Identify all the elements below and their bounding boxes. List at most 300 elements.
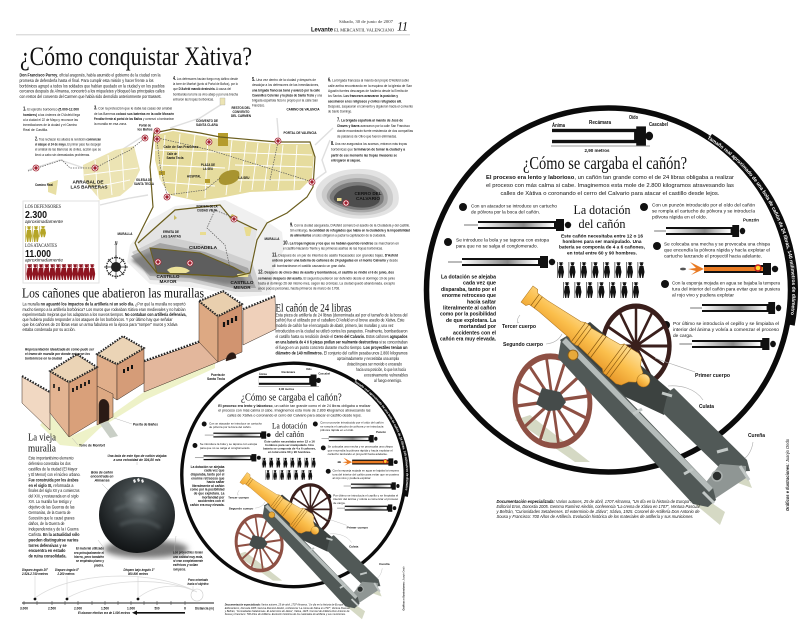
panel: defenders and attackers: 2.300	[25, 210, 47, 221]
heading: the old wall: muralla	[28, 442, 56, 454]
cannonball callouts: Almansa	[94, 478, 110, 482]
panel: how the cannon was loaded (small circle): Tercer cuerpo	[228, 495, 249, 499]
back wall right	[243, 297, 276, 345]
cannonball callouts: Bola de cañón	[91, 470, 114, 474]
map place labels: SANTA CLARA	[196, 123, 218, 127]
text: crew danger: La dotación se alejaba	[441, 274, 497, 280]
cannonball callouts: romperse.	[173, 567, 186, 571]
chart: firing range: 1.000	[127, 606, 135, 610]
map place labels: LA SEU	[238, 176, 250, 180]
loading steps: se rompía el cartucho de pólvora y se introducía	[652, 208, 755, 214]
text: crew danger: enorme retroceso que	[442, 293, 496, 299]
numbered siege steps 4-8: que D'Asfeld mandó destruirla. A causa del	[173, 86, 231, 91]
wall callouts: borbónicos en la ciudad	[25, 356, 63, 360]
loading steps: Con la esponja mojada en agua se bajaba la tempera	[672, 280, 780, 286]
text: the old wall: defensivo conectaba los dos	[28, 461, 71, 466]
text: crew size: Este cañón necesitaba entre 12 o 16	[561, 234, 643, 240]
panel: how the cannon was loaded (small circle)	[180, 362, 410, 620]
panel: how the cannon was loaded (small circle): de que explotara. La	[194, 492, 224, 496]
panel: how the cannon was loaded (small circle): Por último se introducía el cepillo y se limpiaba el	[333, 493, 399, 497]
panel: defenders and attackers: LOS DEFENSORES	[25, 205, 61, 210]
numbered siege steps 4-8: de Santo Domingo.	[328, 108, 352, 114]
graphics credit: Gráficos e Ilustraciones: Juanjo Ondo	[785, 439, 790, 511]
loading steps: cartucho lanzando el proyectil hacia adelante.	[664, 254, 762, 260]
numbered siege steps 4-8: bombardeo la torre se vino abajo y por una brecha	[173, 92, 239, 96]
loading steps: Por último se introducía el cepillo y se limpiaba el	[673, 321, 779, 327]
text: crew danger: hacía saltar	[467, 299, 497, 305]
text: the walls paragraph: que hubiera podido responder a los ataques de los borbónicos. Y por último hay que señalar	[22, 317, 173, 322]
panel: how the cannon was loaded (small circle): calles de Xàtiva o coronando el cerro del Calvario para atacar el castillo desde lejos.	[227, 414, 362, 418]
cannonball callouts: Una bola de este tipo de cañón viajaba	[108, 454, 166, 458]
numbered siege steps 9-12: 10. La tropa inglesa y los que no habían querido rendirse se marcharon en	[283, 240, 399, 246]
chart: firing range: El alcance efectivo era de 1.000 metros	[78, 610, 131, 615]
map place labels: Calle de San Francisco	[164, 145, 199, 149]
loading steps: Con un punzón introducido por el oído del cañón	[652, 202, 755, 208]
cannonball callouts: ni eran completamente	[173, 559, 203, 563]
gate block	[97, 386, 113, 425]
numbered siege steps 4-8: Después, saquearon el convento y siguieron hacia el convento	[328, 104, 414, 108]
map place labels: HOSPITAL	[187, 174, 202, 178]
text: the old wall: Sucesión que le causó graves	[28, 516, 75, 520]
panel: how the cannon was loaded (small circle): Con un atacador se introduce un cartucho	[209, 421, 262, 425]
chart: firing range: 2.200 metros	[57, 572, 75, 576]
numbered siege steps 1-3: el arrabal de las Barreras de civiles, acción que se	[35, 146, 102, 152]
middle tower	[97, 355, 117, 400]
numbered siege steps 1-3: 2. Tras rechazar los aliados la rendición comienzan	[35, 136, 101, 142]
header: newspaper strip: Levante	[311, 26, 334, 34]
map place labels: MURALLA	[264, 237, 280, 241]
illustration: cannonball	[99, 477, 188, 558]
text: the old wall: de ruina consolidada.	[28, 554, 66, 559]
text: crew danger: como por la posibilidad	[440, 312, 496, 318]
panel: how the cannon was loaded (small circle): Primer cuerpo	[347, 525, 368, 529]
panel: how the cannon was loaded (small circle): cartucho lanzando el proyectil hacia adelante.	[328, 452, 388, 456]
map place labels: ARRABAL DE	[72, 180, 104, 184]
loading steps: al rojo vivo y pudiera explotar	[672, 292, 734, 298]
panel: how the cannon was loaded (small circle): Gráficos e Ilustraciones: Juanjo Ondo	[401, 566, 405, 611]
numbered siege steps 1-3: Fenollar frente al portal de los Baños y comenzó a bombardear	[94, 116, 174, 121]
loading steps: de pólvora por la boca del cañón.	[471, 210, 540, 216]
panel: how the cannon was loaded (small circle): Documentación especializada: Varios autores, 25 de abril, 1707 Almansa, “Un día en la historia de Europa”.	[225, 603, 345, 607]
text: crew danger: disparaba, tanto por el	[441, 287, 496, 293]
numbered siege steps 4-8: los Santos. Los franceses avanzaron la posición y	[328, 93, 399, 98]
text: the old wall: torres defensivas y se	[28, 543, 67, 548]
numbered siege steps 4-8: desalojar a los defensores de las inmediaciones,	[252, 82, 319, 87]
text: 24-pound cannon: el castillo hasta su rendición desde el Cerro del Calvario. Estos cañones agrupados	[276, 334, 408, 339]
numbered siege steps 4-8: donde encontrarán fuerte resistencia de dos compañías	[337, 128, 413, 133]
text: the old wall: finales del siglo XII y a comienzos	[28, 488, 80, 493]
panel: how the cannon was loaded (small circle): El proceso era lento y laborioso , un cañón tan grande como el de 24 libras obligaba a realizar	[218, 404, 371, 408]
numbered siege steps 1-3: llevó a cabo sin demasiados problemas.	[35, 152, 90, 157]
intro text: calles de Xàtiva o coronando el cerro del Calvario para atacar el castillo desde lejos.	[500, 191, 720, 197]
cannonball callouts: encontrada en	[90, 474, 114, 478]
left tower	[50, 372, 69, 437]
panel: how the cannon was loaded (small circle): se rompía el cartucho de pólvora y se introducía	[320, 424, 384, 428]
text: the walls paragraph: La muralla no aguantó los impactos de la artillería ni un solo día. ¿Por qué la muralla no soportó	[22, 302, 186, 306]
loading steps: Se introduce la bola y se tapona con estopa	[456, 238, 549, 244]
panel: how the cannon was loaded (small circle): 2,90 metros	[279, 387, 294, 391]
loading steps	[444, 202, 781, 350]
chart: firing range: 500	[154, 606, 160, 610]
text: the old wall: Germanías, de la Guerra de	[28, 510, 71, 515]
map place labels: LAS BARRERAS	[70, 184, 108, 190]
heading: the old wall: La vieja	[28, 432, 56, 444]
chart: firing range: Poco orientado	[188, 578, 209, 582]
text: the old wall: castillos de la ciudad (El Mayor	[28, 466, 78, 471]
intro text: el proceso con más calma si cabe. Imaginemos esta mole de 2.800 kilogramos atravesando las	[486, 183, 734, 189]
numbered siege steps 1-3: de las Barreras colocó sus baterías en la calle Mossèn	[94, 111, 174, 116]
panel: how the cannon was loaded (small circle): al rojo vivo y pudiera explotar	[333, 476, 371, 480]
text: 24-pound cannon: cañón) fue el utilizado por el caballero D'Asfeld en el breve asedio de Xàtiva. Este	[276, 318, 405, 322]
text: the walls paragraph: que los cañones de 24 libras eran un arma fabulosa en la época para “romper” muros y Xàtiva	[22, 322, 178, 327]
panel: how the cannon was loaded (small circle): de carga.	[333, 501, 346, 505]
map place labels: Calle de	[167, 152, 177, 156]
panel: defenders and attackers: aproximadamente	[25, 219, 63, 224]
panel: how the cannon was loaded (small circle): mortandad por	[202, 495, 225, 499]
numbered siege steps 4-8: 5. Una vez dentro de la ciudad y después de	[252, 77, 317, 83]
panel: how the cannon was loaded (small circle): Recámara	[282, 370, 295, 374]
cannonball callouts: una calidad muy mala,	[173, 555, 203, 559]
right tower	[199, 302, 218, 362]
cannonball callouts: a una velocidad de 304,80 m/s	[114, 458, 160, 462]
diagram: cannon bore: Cascabel	[649, 122, 669, 128]
text: the old wall: pueden distinguirse varios	[28, 537, 79, 542]
panel: how the cannon was loaded (small circle): Sousa y Francisco: 700 Años de Artillería. Evolución histórica de los materiales de artillería y sus municiones.	[225, 612, 346, 616]
numbered siege steps 4-8: Chaves y Ibarra avanzaron por la calle San Francisco	[337, 123, 411, 128]
cannon part labels	[502, 315, 765, 458]
text: 24-pound cannon: excesivamente vulnerables	[364, 372, 408, 378]
text: the old wall: Carlista. En la actualidad sólo	[28, 532, 80, 537]
diagram: cannon bore: Recámara	[589, 120, 611, 126]
numbered siege steps 4-8: la torre de Manfort (junto al Portal de Baños), por lo	[173, 81, 239, 86]
numbered siege steps 1-3	[23, 106, 174, 157]
castle band	[150, 248, 249, 277]
loading steps: interior del ánima y volvía a comenzar el proceso	[673, 327, 779, 333]
intro text block	[20, 72, 164, 99]
wall callouts	[25, 348, 226, 448]
panel: how the cannon was loaded (small circle): y Beltrán, “Curiosidades Setabenses. El exterminio de Játiva”, Xàtiva, 1925. Coronel de Artillería Don Antonio de	[224, 609, 350, 613]
text: 24-pound cannon: modelo de cañón fue el encargado de abatir, primero, las murallas y, una vez	[276, 323, 394, 328]
loading steps: Punzón	[743, 218, 759, 224]
text: the old wall: del XIII, y restaurada en el siglo	[28, 494, 79, 499]
cannon part labels: Culata	[699, 404, 714, 410]
numbered siege steps 4-8: 7. La brigada española al mando de José de	[337, 118, 404, 124]
map place labels: CIUDAD VIEJA	[197, 208, 217, 212]
illustration: medieval wall and towers	[22, 291, 276, 447]
cannon part labels: Segundo cuerpo	[503, 342, 543, 348]
heading: the cannons that brought down the walls: Los cañones que abatieron las murallas	[22, 286, 204, 300]
numbered siege steps 1-3: a la ciudad el 22 de Mayo y reconoce las	[23, 117, 78, 122]
map place labels: CERRO DEL	[354, 191, 382, 196]
text: the old wall: Este importantísimo elemento	[28, 456, 74, 460]
map place labels: IGLESIA DE	[136, 178, 152, 182]
map place labels: PLAZA DE	[201, 163, 215, 167]
documentation credits: Sousa y Francisco: 700 Años de Artillería. Evolución histórica de los materiales de artillería y sus municiones.	[496, 514, 694, 519]
diagram: cannon bore	[551, 115, 669, 154]
chart: firing range: 2.000	[74, 606, 82, 610]
map place labels: Santa Tecla	[166, 156, 184, 160]
numbered siege steps 4-8: una brigada francesa bená y avanzó por la calle	[252, 88, 321, 92]
panel: how the cannon was loaded (small circle): Este cañón necesitaba entre 12 o 16	[264, 440, 315, 444]
panel: how the cannon was loaded (small circle): Con un punzón introducido por el oído del cañón	[320, 421, 384, 425]
map place labels: PORTAL DE VALENCIA	[284, 131, 317, 135]
header: newspaper strip: 11	[397, 18, 408, 34]
terrain around citadel and castle	[127, 200, 284, 297]
numbered siege steps 4-8: partir de ese momento las tropas invasoras se	[331, 152, 398, 158]
map place labels: CAMINO DE VALENCIA	[286, 108, 320, 112]
panel: how the cannon was loaded (small circle): cañón era muy elevada.	[190, 503, 224, 507]
panel: how the cannon was loaded (small circle): pólvora rápida en el oído.	[320, 428, 354, 432]
map place labels: MAYOR	[160, 279, 177, 284]
siege markers	[33, 128, 315, 266]
panel: how the cannon was loaded (small circle): de pólvora por la boca del cañón.	[209, 425, 252, 429]
chart: firing range: 2.524-2.740 metros	[21, 572, 48, 576]
text: 24-pound cannon: aproximadamente y necesitaba una amplia	[337, 356, 400, 361]
numbered siege steps 9-12: de alimentarlos a todos obligaron a pactar la capitulación de la ciudadela.	[290, 232, 386, 238]
panel: how the cannon was loaded (small circle): ¿Cómo se cargaba el cañón?	[241, 392, 342, 404]
map place labels: DEL CARMEN	[231, 114, 251, 118]
icon: attacker soldiers	[26, 264, 95, 280]
text: the old wall: encuentra en estado	[28, 548, 66, 553]
panel: how the cannon was loaded (small circle): para que no se salga el conglomerado.	[200, 446, 250, 450]
intro text block: cercanos después de Almansa, concentró a los miqueletes y bloqueó las principales calles	[20, 89, 164, 94]
map place labels: CASTILLO	[156, 274, 180, 279]
city blocks	[48, 98, 314, 236]
chart: firing range: 800-900 metros	[128, 572, 148, 576]
panel: how the cannon was loaded (small circle): el proceso con más calma si cabe. Imaginemos esta mole de 2.800 kilogramos atravesando las	[218, 409, 371, 413]
wall callouts: Torre de Monfort	[79, 444, 106, 448]
map place labels: CONVENTO	[232, 110, 250, 114]
text: crew danger: cada vez que	[463, 281, 496, 287]
panel: how the cannon was loaded (small circle): Ánima	[259, 371, 267, 376]
documentation credits	[496, 499, 700, 519]
cannonball callouts: hierro, pero también	[74, 555, 105, 559]
intro text	[486, 175, 734, 197]
panel: how the cannon was loaded (small circle): Con la esponja mojada en agua se bajaba la tempera	[333, 469, 399, 473]
header: newspaper strip: Sábado, 30 de junio de 2007	[339, 19, 394, 25]
numbered siege steps 4-8: borbónicas que terminaron de tomar la ciudad y a	[331, 146, 406, 152]
numbered siege steps 9-12: 9. Con la ciudad asegurada, D'Asfeld comenzó el asedio de la Ciudadela y del castillo.	[290, 222, 410, 228]
chart: firing range: Disparo ángulo 20°	[22, 568, 48, 572]
panel: how the cannon was loaded (small circle): Editorial Eron, Donostia 2005. Gemma Ramírez Aledón, conferencia “La crema de Xàtiva en 1707”, Ventura Pascual	[225, 606, 350, 610]
text: the old wall	[28, 456, 80, 559]
panel: how the cannon was loaded (small circle): hombres para ser manipulado. Una	[265, 443, 314, 447]
text: 24-pound cannon: al fuego enemigo.	[374, 378, 402, 383]
panel: how the cannon was loaded (small circle): Tamaño real aproximado de una bola de cañón de 24 libras, 140 milímetros de diámetro	[354, 380, 409, 490]
diagram: cannon bore: 2,90 metros	[584, 148, 610, 154]
cannon part labels: Tercer cuerpo	[502, 324, 536, 330]
text: 24-pound cannon: introducidos en la ciudad se utilizó contra los parapetos. Finalmente, bombardearon	[276, 328, 408, 333]
diagram: cannon bore: Ánima	[552, 122, 565, 129]
panel: how the cannon was loaded (large circle)	[424, 105, 798, 525]
panel: how the cannon was loaded (small circle): Cascabel	[318, 371, 330, 375]
text: crew size	[559, 234, 646, 256]
panel: how the cannon was loaded (small circle): interior del ánima y volvía a comenzar el proceso	[333, 497, 399, 501]
intro text block: Don Francisco Purroy, oficial aragonés, había asumido el gobierno de la ciudad con la	[20, 72, 161, 78]
numbered siege steps 9-12: semanas después del asalto. El segundo pudieron ser defendió desde el domingo 19 de junio	[258, 276, 396, 280]
numbered siege steps 4-8: asesinaron a los religiosos y civiles refugiados allí.	[328, 98, 402, 104]
text: crew danger: mortandad por	[459, 324, 497, 330]
loading steps: Se colocaba una mecha y se provocaba una chispa	[664, 242, 770, 248]
title: ¿Cómo conquistar Xàtiva?	[20, 42, 252, 71]
text: 24-pound cannon: el fuego en un punto concreto durante mucho tiempo. Los proyectiles tenían un	[276, 345, 408, 350]
numbered siege steps 9-12: unos pocos personas, hasta primeros de marzo de 1708.	[258, 286, 340, 290]
panel: how the cannon was loaded (small circle): en total entre 60 y 90 hombres.	[268, 450, 311, 454]
loading steps: pólvora rápida en el oído.	[652, 214, 707, 220]
hill: Cerro del Calvario	[316, 169, 399, 219]
map place labels	[35, 106, 382, 290]
heading: the old wall	[28, 432, 56, 454]
icon: crew soldiers	[557, 262, 644, 298]
numbered siege steps 9-12: 11. Después de un par de intentos de asalto fracasados con grandes bajas, D'Asfeld	[272, 252, 398, 258]
panel: how the cannon was loaded (small circle): batería se componía de 4 a 6 cañones,	[263, 447, 316, 451]
panel: how the cannon was loaded (small circle): La dotación	[272, 421, 307, 430]
attack routes	[28, 138, 312, 268]
numbered siege steps 4-8: 4. Los defensores hacían fuego muy dañino desde	[173, 76, 239, 82]
chart: firing range: 1.500	[101, 606, 109, 610]
map place labels: RESTOS DEL	[232, 106, 251, 110]
cannonball callouts: El material utilizado	[76, 546, 105, 550]
walls	[135, 129, 315, 277]
text: 24-pound cannon: hacia una posición, lo que los hacía	[356, 367, 406, 372]
back wall left	[22, 377, 50, 430]
chart: firing range: Disparo ángulo 8°	[55, 568, 79, 572]
numbered siege steps 9-12: hasta el domingo 26 del mismo mes, según las crónicas. La ciudad quedó abandonada, excepto	[258, 280, 396, 286]
text: crew danger: accidentes con el	[453, 330, 496, 336]
cannonball callouts: se empleaba plomo y	[76, 559, 105, 563]
panel: how the cannon was loaded (small circle): Segundo cuerpo	[229, 506, 253, 510]
icon: compass: N	[113, 242, 118, 247]
chart: firing range: 2.500	[48, 606, 56, 610]
panel: how the cannon was loaded (small circle): La dotación se alejaba	[191, 465, 224, 469]
cannonball callouts: esféricos y solían	[173, 563, 199, 567]
map place labels: LAS SANTAS	[161, 234, 181, 238]
panel: how the cannon was loaded (small circle): literalmente al cañón	[192, 484, 224, 488]
text: the old wall: y El Menor) con el núcleo urbano.	[28, 472, 80, 477]
text: crew danger: cañón era muy elevada.	[440, 336, 496, 342]
ring with real-size caption: Tamaño real aproximado de una bola de cañón de 24 libras, 140 milímetros de diámetro	[708, 136, 796, 315]
chart: firing range: 0	[184, 606, 186, 610]
panel: defenders and attackers: LOS ATACANTES	[25, 244, 57, 249]
loading steps: que encendía la pólvora rápida y hacía explotar el	[664, 248, 770, 254]
cannon part labels: Primer cuerpo	[695, 373, 730, 379]
heading: cannon crew: La dotación	[574, 202, 631, 217]
main curtain wall	[144, 337, 218, 392]
map place labels: los Baños	[138, 128, 152, 132]
panel: defenders and attackers	[23, 201, 99, 283]
wall callouts: Puerta de	[211, 373, 225, 377]
text: crew size: hombres para ser manipulado. Una	[562, 239, 642, 245]
text: 24-pound cannon: Esta pieza de artillería de 24 libras (denominada así por el tamaño de la boca del	[276, 312, 408, 318]
text: the old wall: XVI. La muralla fue testigo y	[28, 499, 72, 504]
panel: how the cannon was loaded (small circle): accidentes con el	[198, 499, 224, 503]
panel: how the cannon was loaded (small circle): Cureña	[379, 562, 390, 566]
panel: how the cannon was loaded (small circle): como por la posibilidad	[190, 488, 224, 492]
wall callouts: Representación idealizada de cómo pudo ser	[25, 348, 94, 352]
map place labels: CIUDADELA	[189, 245, 218, 251]
text: crew danger: literalmente al cañón	[443, 306, 496, 312]
numbered siege steps 1-3: la muralla en esa zona.	[94, 121, 127, 126]
numbered siege steps 4-8: entregaron al saqueo.	[331, 158, 361, 162]
text: the old wall: Independencia y de la I Guerra	[28, 526, 79, 531]
icon: compass	[104, 241, 128, 279]
cannonball callouts: piedra.	[93, 563, 104, 567]
map place labels: SANTA TECLA	[134, 182, 154, 186]
panel: how the cannon was loaded (small circle): Se introduce la bola y se tapona con estopa	[200, 442, 257, 446]
text: 24-pound cannon: dotación para ser movido o encarado	[347, 362, 403, 366]
text: the old wall: objetivo de las Guerras de las	[28, 505, 75, 510]
numbered siege steps 1-3: hombres) a las órdenes de D'Asfeld llega	[23, 112, 81, 117]
map place labels: Camino Real	[35, 183, 53, 187]
numbered siege steps 9-12: 12. Después de cinco días de asalto y bombardeos, el castillo se rindió el 6 de junio, dos	[258, 270, 395, 276]
chart: firing range: Distancia (m)	[195, 606, 215, 610]
illustration: 24-pound cannon	[509, 279, 752, 525]
text: the walls paragraph: mucho tiempo a la artillería borbónica? Los muros que rodeaban Xàtiva eran medievales y no habían	[22, 307, 186, 312]
intro text: El proceso era lento y laborioso , un cañón tan grande como el de 24 libras obligaba a realizar	[486, 175, 734, 181]
heading: ¿Cómo se cargaba el cañón?	[523, 153, 687, 173]
numbered siege steps 4-8: calle arriba encontrando en la esquina de la iglesia de San	[328, 83, 412, 88]
panel: how the cannon was loaded (small circle): que encendía la pólvora rápida y hacía explotar el	[328, 448, 393, 452]
numbered siege steps 4-8: Francisco.	[252, 102, 265, 108]
icon: defender soldiers	[25, 226, 46, 242]
wall callouts: Puerta de Baños	[133, 422, 158, 426]
numbered siege steps 1-3: el ataque el 24 de mayo. El primer paso fue despejar	[35, 142, 101, 146]
map place labels: MENOR	[234, 285, 251, 290]
text: 24-pound cannon: en una batería de 4 ó 6 piezas podían ser realmente destructivas si se concentraban	[276, 339, 408, 344]
numbered siege steps 4-8	[173, 76, 414, 162]
diagram: cannon bore: Oído	[629, 115, 638, 121]
text: the old wall: en el siglo XI, reformada a	[28, 483, 74, 488]
text: the old wall: daños, de la Guerra de	[28, 521, 65, 526]
map place labels: ERMITA DE	[163, 230, 179, 234]
panel: how the cannon was loaded (small circle): del cañón	[275, 430, 304, 439]
panel: how the cannon was loaded (small circle): hacía saltar	[207, 480, 225, 484]
text: crew danger: de que explotara. La	[446, 318, 497, 324]
loading steps: tura del interior del cañón para evitar que se pusiera	[672, 286, 780, 292]
numbered siege steps 9-12	[258, 222, 410, 290]
panel: how the cannon was loaded (small circle): tura del interior del cañón para evitar que se pusiera	[333, 472, 399, 476]
ring with real-size caption	[424, 105, 798, 475]
cannonball callouts: Los proyectiles tenían	[173, 550, 204, 554]
loading steps: para que no se salga el conglomerado.	[456, 244, 538, 250]
loading steps: de carga.	[673, 333, 693, 339]
roads	[28, 104, 333, 205]
panel: how the cannon was loaded (small circle): Culata	[349, 544, 359, 548]
documentation credits: Editorial Eron, Donostia 2005. Gemma Ramírez Aledón, conferencia “La crema de Xàtiva en 1707”, Ventura Pascual	[496, 504, 700, 509]
panel: how the cannon was loaded (small circle): Oído	[306, 367, 312, 371]
numbered siege steps 4-8: de paisanos de Olivo que fueron eliminadas.	[337, 134, 397, 138]
chart: firing range: Disparo bajo ángulo 3°	[124, 568, 155, 572]
text: the old wall: Fue construida por los árabes	[28, 477, 79, 482]
text: 24-pound cannon: diámetro de 140 milímetros. El conjunto del cañón pesaba unos 2.800 kilogramos	[276, 350, 408, 356]
map place labels: Portal de	[139, 124, 151, 128]
intro text block: con restos del convento del Carmen que había sido demolido anteriormente por Bassett.	[20, 94, 162, 99]
heading: 24-pound cannon: El cañón de 24 libras	[276, 302, 352, 314]
numbered siege steps 9-12: el castillo Nacando Tiente y las primeras asafías de las tropas borbónicas.	[283, 246, 383, 250]
numbered siege steps 4-8: 8. Una vez asegurados los accesos, entraron más tropas	[331, 141, 407, 147]
header: newspaper strip: EL MERCANTIL VALENCIANO	[334, 28, 394, 32]
text: the walls paragraph	[22, 302, 186, 332]
map place labels: CONVENTO DE	[196, 119, 218, 123]
text: crew size: en total entre 60 y 90 hombres.	[567, 250, 637, 256]
heading: cannon crew	[574, 202, 631, 231]
panel: how the cannon was loaded (small circle): Se colocaba una mecha y se provocaba una chispa	[328, 445, 393, 449]
text: crew size: batería se componía de 4 a 6 cañones,	[559, 245, 646, 251]
map of Xàtiva	[28, 98, 399, 297]
numbered siege steps 4-8: 6. La brigada francesa al mando del propio D'Asfeld subió	[328, 78, 410, 84]
text: the walls paragraph: estaba condenada por su acción.	[22, 327, 76, 332]
numbered siege steps 1-3: Real de Castilla.	[23, 127, 48, 132]
